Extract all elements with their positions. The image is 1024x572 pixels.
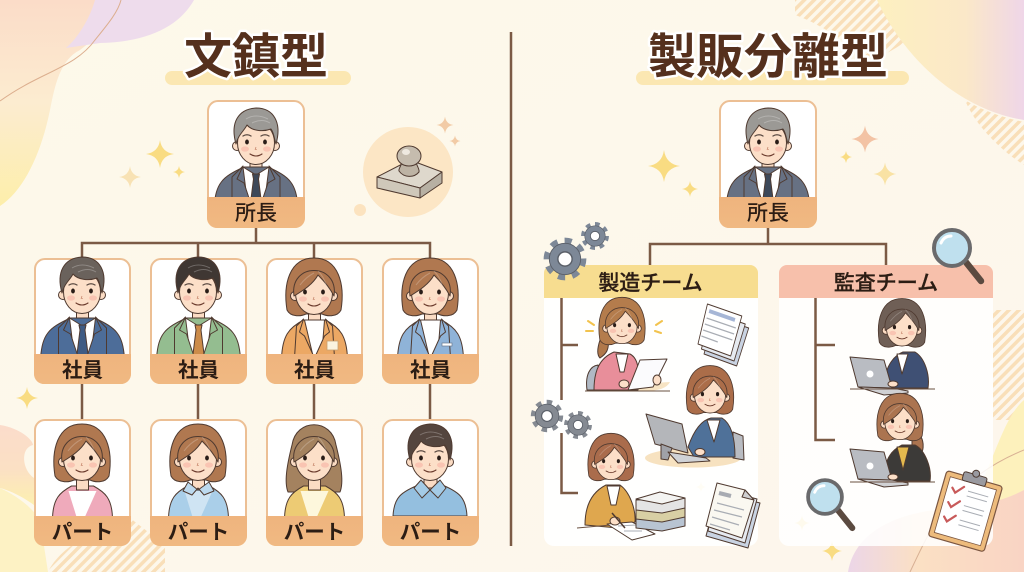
card: パート 1: パート: [52, 521, 113, 544]
icon: magnifier bottom: [808, 480, 852, 528]
icon: magnifier top: [934, 230, 981, 281]
tree lines: [816, 298, 835, 440]
team header: 監査チーム: [779, 265, 993, 298]
card: 所長: 所長: [235, 202, 277, 225]
team header: 製造チーム: 製造チーム: [598, 272, 703, 295]
card: 所長: [719, 101, 817, 228]
icon: document stack: [706, 483, 760, 548]
sparkles: [648, 126, 896, 561]
card: 社員 2: 社員: [178, 359, 219, 382]
icon: clipboard checklist: [928, 462, 1005, 552]
icon: file stack: [636, 492, 685, 531]
heading underline: [636, 71, 909, 85]
card: パート 4: [382, 420, 479, 546]
team header: 製造チーム: [544, 265, 758, 298]
card: パート 1: [34, 420, 131, 546]
panel: 監査チーム: [779, 230, 1005, 552]
icon: gears top: [547, 224, 607, 277]
team body: [779, 298, 993, 546]
person: auditor with laptop 2: [850, 393, 935, 487]
card: 所長: 所長: [747, 202, 789, 225]
card: 所長: [207, 101, 305, 228]
card: パート 2: [150, 420, 247, 546]
panel: 製販分離型: [533, 31, 1005, 561]
person: writing by a stack of papers: [577, 433, 685, 540]
card: 社員 3: [266, 258, 363, 384]
card: パート 3: パート: [284, 521, 345, 544]
divider: [510, 32, 512, 546]
connectors: [650, 228, 886, 265]
team body: [544, 298, 758, 546]
card: 社員 4: 社員: [410, 359, 451, 382]
panel: 文鎮型: [16, 31, 479, 546]
icon: gears middle: [533, 402, 590, 437]
card: 社員 2: [150, 257, 247, 384]
card: 社員 1: 社員: [62, 359, 103, 382]
heading underline: [165, 71, 351, 85]
card: パート 2: パート: [168, 521, 229, 544]
card: パート 3: [266, 420, 363, 546]
person: working at monitor: [645, 366, 744, 468]
card: 社員 4: [382, 258, 479, 384]
heading: 製販分離型: 製販分離型: [648, 31, 888, 84]
sparkles: [16, 116, 460, 409]
icon: stamp: [354, 127, 453, 217]
tree lines: [562, 298, 578, 493]
team header: 監査チーム: 監査チーム: [834, 272, 938, 295]
card: 社員 1: [34, 257, 131, 384]
heading: 文鎮型: 文鎮型: [184, 31, 328, 84]
panel: 製造チーム: [533, 224, 760, 548]
person: reviewing a document: [585, 297, 670, 391]
card: 社員 3: 社員: [294, 359, 335, 382]
connectors: [82, 228, 430, 419]
card: パート 4: パート: [400, 521, 461, 544]
person: auditor with laptop 1: [850, 299, 935, 395]
icon: report stack: [698, 304, 749, 366]
